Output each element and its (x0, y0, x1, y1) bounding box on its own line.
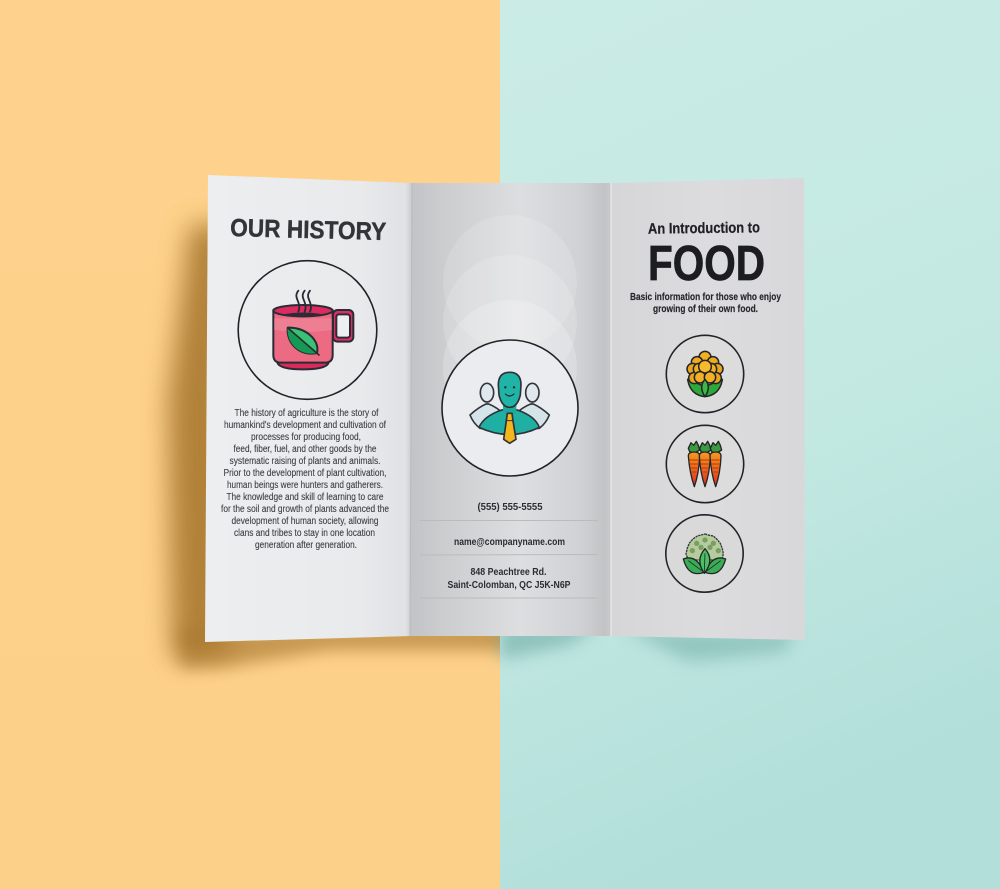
contact details: 848 Peachtree Rd. (470, 566, 547, 578)
contact dividers (420, 520, 598, 598)
contact details: Saint-Colomban, QC J5K-N6P (448, 579, 570, 591)
subtitle heading: An Introduction to (648, 219, 760, 238)
panel: contact (410, 183, 611, 636)
text block: history of agriculture: systematic raising of plants and animals. (230, 456, 380, 467)
text block: history of agriculture: feed, fiber, fuel, and other goods by the (234, 444, 377, 455)
tagline (630, 291, 781, 315)
heading: our history: OUR HISTORY (230, 214, 387, 246)
icon: corn (666, 335, 744, 413)
contact details (448, 501, 570, 591)
ghost circles (443, 215, 577, 434)
text block: history of agriculture: humankind's development and cultivation of (224, 420, 386, 431)
tagline: Basic information for those who enjoy (630, 291, 781, 303)
panel: our history (205, 175, 412, 642)
contact details: (555) 555-5555 (478, 501, 543, 513)
brochure cast shadow on orange (168, 225, 510, 668)
text block: history of agriculture: for the soil and growth of plants advanced the (221, 504, 389, 515)
text block: history of agriculture: The history of agriculture is the story of (234, 408, 379, 419)
fold highlights (410, 183, 611, 636)
text block: history of agriculture: Prior to the development of plant cultivation, (224, 468, 386, 479)
tagline: growing of their own food. (653, 303, 758, 315)
text block: history of agriculture: generation after generation. (255, 540, 357, 551)
contact details: name@companyname.com (454, 536, 565, 548)
icon: cauliflower (666, 515, 743, 592)
text block: history of agriculture: human beings were hunters and gatherers. (227, 480, 383, 491)
text block: history of agriculture: development of human society, allowing (232, 516, 378, 527)
text block: history of agriculture: processes for producing food, (251, 432, 361, 443)
main heading: food: FOOD (648, 237, 765, 291)
icon: mug with leaf (238, 261, 377, 399)
background: mint half (500, 0, 1000, 889)
icon: team with tie (442, 340, 578, 476)
text block: history of agriculture: clans and tribes to stay in one location (234, 528, 375, 539)
text block: history of agriculture (221, 408, 389, 551)
text block: history of agriculture: The knowledge and skill of learning to care (226, 492, 384, 503)
panel: cover (611, 178, 805, 640)
background: orange half (0, 0, 500, 889)
brochure cast shadow on mint (500, 625, 795, 662)
icon: carrots (666, 425, 744, 503)
